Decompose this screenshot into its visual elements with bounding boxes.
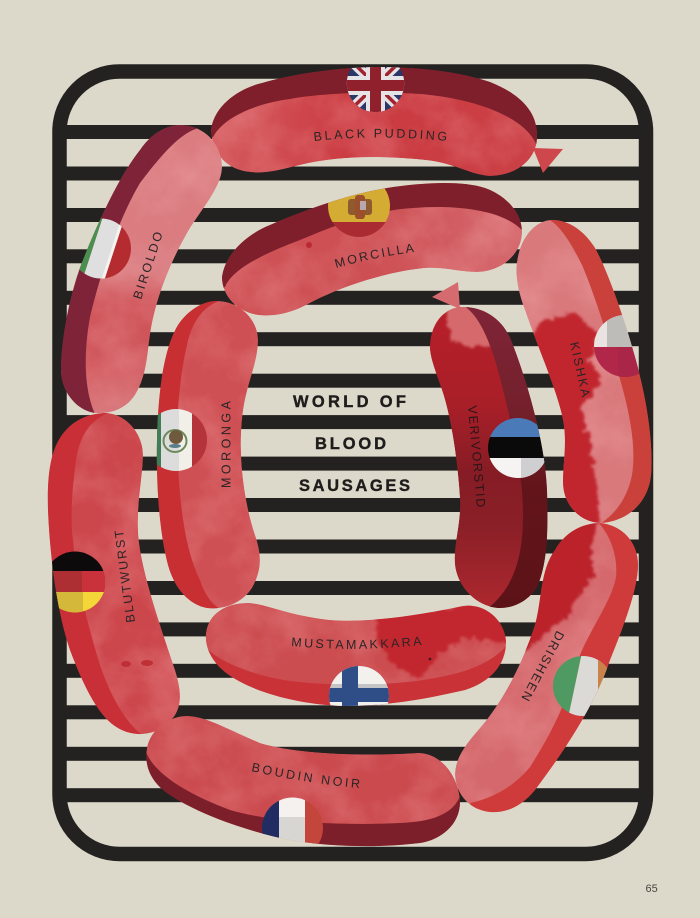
flag: Italy	[80, 218, 131, 278]
label: morcilla: MORCILLA	[334, 244, 414, 268]
flag: Finland	[329, 666, 389, 706]
flag: United Kingdom	[346, 67, 404, 112]
label: mustamakkara: MUSTAMAKKARA	[292, 636, 422, 649]
label: biroldo: BIROLDO	[133, 232, 162, 299]
flag: Estonia	[488, 418, 544, 478]
title: BLOOD	[315, 435, 386, 453]
flag: Poland	[594, 315, 640, 377]
grill: frame and bars	[60, 72, 646, 854]
label: verivorstid: VERIVORSTID	[468, 405, 485, 507]
tail: verivorstid	[432, 282, 460, 309]
flag: Germany	[52, 552, 105, 612]
sausage: mustamakkara	[206, 603, 506, 706]
sausage: biroldo	[49, 120, 222, 414]
sausage: kishka	[516, 220, 652, 523]
flag: Spain	[328, 188, 390, 237]
flag: France	[262, 798, 323, 844]
label: boudin noir: BOUDIN NOIR	[252, 762, 360, 788]
label: kishka: KISHKA	[570, 342, 590, 398]
label: black pudding: BLACK PUDDING	[314, 128, 446, 141]
flag: Ireland	[553, 656, 608, 716]
title: SAUSAGES	[299, 477, 410, 495]
tail: black pudding	[533, 148, 563, 173]
sausage: verivorstid	[430, 307, 548, 608]
sausage: boudin noir	[146, 716, 460, 846]
title	[293, 393, 410, 495]
label: drisheen: DRISHEEN	[522, 630, 564, 702]
label: blutwurst: BLUTWURST	[114, 531, 135, 622]
sausage: moronga	[156, 301, 260, 608]
label: moronga: MORONGA	[222, 401, 230, 487]
flag: Mexico	[156, 409, 207, 471]
sausage: drisheen	[455, 523, 638, 812]
sausage: black pudding	[211, 67, 537, 176]
sausage: morcilla	[222, 183, 522, 316]
title: WORLD OF	[293, 393, 406, 411]
page number: 65	[646, 883, 658, 895]
sausage: blutwurst	[40, 410, 180, 740]
